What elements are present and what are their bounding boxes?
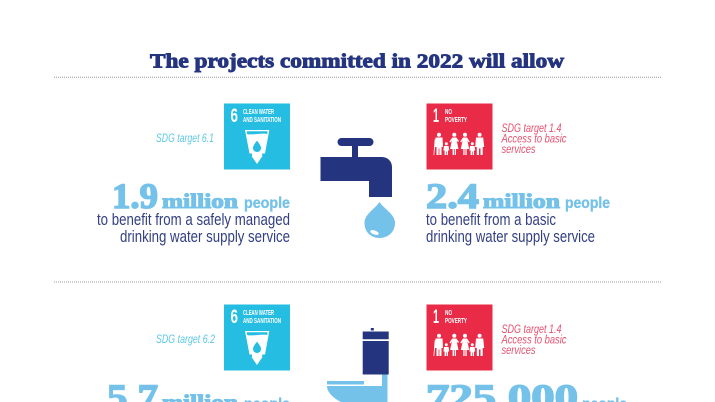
icon: SDG 1 tile: POVERTY bbox=[445, 117, 467, 124]
icon: SDG 1 tile bbox=[426, 304, 492, 370]
panel: sanitation, target 1.4 bbox=[426, 304, 627, 402]
label: SDG target 1.4: SDG target 1.4 bbox=[502, 123, 562, 135]
icon: SDG 6 tile: AND SANITATION bbox=[243, 318, 281, 325]
label: SDG target 1.4: Access to basic bbox=[501, 134, 567, 146]
label: SDG target 1.4: SDG target 1.4 bbox=[502, 324, 562, 336]
statistic: 1.9 million people: 1.9 bbox=[112, 176, 158, 216]
icon: SDG 6 tile: CLEAN WATER bbox=[243, 310, 274, 317]
icon: toilet bbox=[327, 328, 389, 402]
icon: SDG 6 tile bbox=[224, 104, 290, 170]
text: safely managed description: to benefit from a safely managed bbox=[97, 210, 290, 229]
label: SDG target 1.4: services bbox=[502, 144, 536, 156]
icon: SDG 1 tile: NO bbox=[445, 310, 452, 317]
icon: SDG 6 tile bbox=[224, 304, 290, 370]
statistic: 725 000 people bbox=[426, 377, 627, 402]
statistic: 2.4 million people bbox=[426, 176, 610, 216]
panel: drinking water, basic bbox=[426, 104, 610, 246]
icon: SDG 6 tile: 6 bbox=[230, 106, 238, 127]
text: basic service description: drinking water supply service bbox=[426, 227, 595, 246]
icon: SDG 1 tile: 1 bbox=[433, 307, 439, 328]
panel: drinking water, safely managed bbox=[97, 104, 290, 246]
label: SDG target 1.4 bbox=[501, 123, 567, 156]
statistic: 1.9 million people: people bbox=[244, 195, 290, 212]
statistic: 1.9 million people: million bbox=[162, 189, 238, 213]
icon: SDG 6 tile: AND SANITATION bbox=[243, 117, 281, 124]
icon: SDG 1 tile: 1 bbox=[433, 106, 439, 127]
text: safely managed description: drinking water supply service bbox=[120, 227, 290, 246]
divider: top bbox=[54, 76, 661, 78]
icon: SDG 1 tile: POVERTY bbox=[445, 318, 467, 325]
icon: water tap with drop bbox=[320, 138, 395, 238]
icon: SDG 1 tile: NO bbox=[445, 109, 452, 116]
statistic: 2.4 million people: 2.4 bbox=[426, 176, 479, 216]
text: basic service description: to benefit from a basic bbox=[426, 210, 556, 229]
icon: SDG 6 tile: 6 bbox=[230, 307, 238, 328]
text: safely managed description bbox=[97, 210, 290, 246]
text: basic service description bbox=[426, 210, 595, 246]
statistic: 2.4 million people: million bbox=[483, 189, 560, 213]
title: The projects committed in 2022 will allow bbox=[150, 50, 565, 72]
label: SDG target 1.4: Access to basic bbox=[501, 334, 567, 346]
label: SDG target 6.2: SDG target 6.2 bbox=[156, 334, 215, 346]
label: SDG target 1.4: services bbox=[502, 345, 536, 357]
icon: SDG 1 tile bbox=[426, 104, 492, 170]
statistic: 1.9 million people bbox=[112, 176, 290, 216]
statistic: 5.7 million people bbox=[107, 377, 290, 402]
icon: SDG 6 tile: CLEAN WATER bbox=[243, 109, 274, 116]
panel: sanitation, target 6.2 bbox=[107, 304, 290, 402]
statistic: 2.4 million people: people bbox=[565, 195, 610, 212]
divider: middle bbox=[54, 281, 661, 283]
label: SDG target 1.4 bbox=[501, 324, 567, 357]
label: SDG target 6.1: SDG target 6.1 bbox=[156, 133, 214, 145]
